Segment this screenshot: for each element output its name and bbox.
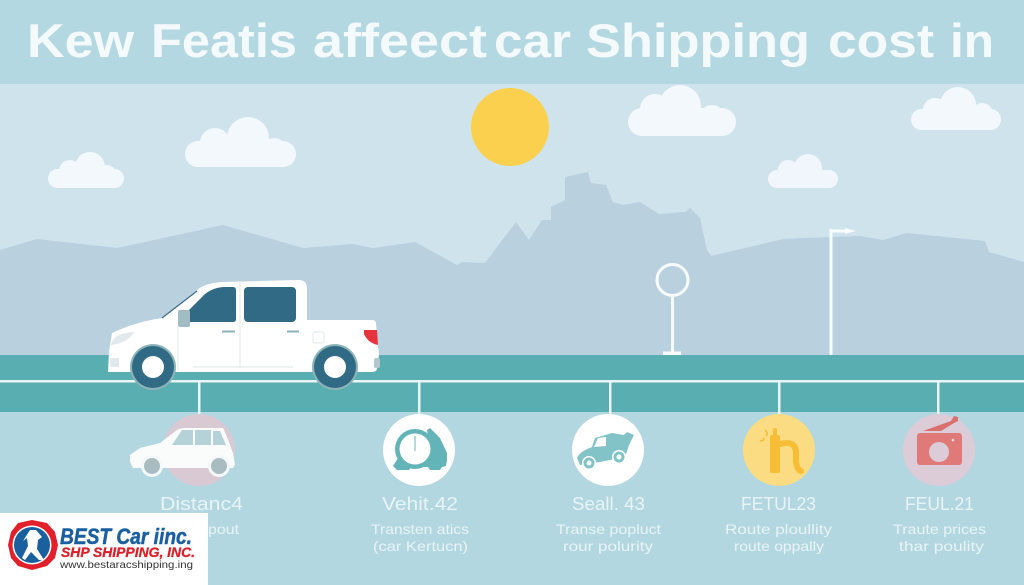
title: affeect xyxy=(313,14,487,67)
label: seasonality: Seall. 43 xyxy=(572,494,645,514)
description: fuel prices xyxy=(893,521,986,554)
title: car xyxy=(494,14,571,67)
description: fuel: route oppally xyxy=(734,538,824,554)
description: vehicle xyxy=(371,521,469,554)
cloud 5 xyxy=(911,87,1001,130)
door handles xyxy=(222,330,299,332)
label: vehicle: Vehit.42 xyxy=(382,494,458,514)
pickup truck xyxy=(108,280,380,390)
title: Kew xyxy=(27,14,134,67)
sky background xyxy=(0,84,1024,359)
description: vehicle: Transten atics xyxy=(371,521,469,537)
factor 1: distance xyxy=(130,414,243,537)
icon: gauge xyxy=(383,414,455,486)
ring road sign xyxy=(657,264,688,354)
sun xyxy=(471,88,549,166)
truck body xyxy=(108,280,379,372)
tailgate mark xyxy=(313,332,324,343)
description: fuel prices: thar poulity xyxy=(899,538,984,554)
bumper xyxy=(374,358,380,368)
cloud 1 xyxy=(48,152,124,188)
title band xyxy=(0,0,1024,84)
description: fuel: Route ploullity xyxy=(725,521,832,537)
title: in xyxy=(950,14,994,67)
label: fuel: FETUL23 xyxy=(741,494,816,514)
cloud 3 xyxy=(628,85,736,136)
cloud 2 xyxy=(185,117,296,167)
factor 4: fuel xyxy=(725,414,832,554)
cloud 4 xyxy=(768,154,838,188)
logo url: www.bestaracshipping.ing xyxy=(59,559,193,571)
fog lamp xyxy=(110,358,119,367)
description: seasonality: rour polurity xyxy=(563,538,653,554)
rear wheel xyxy=(312,344,358,390)
title: cost xyxy=(828,14,934,67)
windshield edge xyxy=(162,291,197,318)
icon: red camera xyxy=(903,414,975,486)
factor 5: fuel prices xyxy=(893,414,986,554)
description: seasonality: Transe popluct xyxy=(556,521,661,537)
title: Featis xyxy=(151,14,297,67)
mountains xyxy=(0,172,1024,360)
mirror xyxy=(178,310,190,327)
description: vehicle: (car Kertucn) xyxy=(373,538,468,554)
logo panel xyxy=(0,513,208,585)
factor 2: vehicle xyxy=(371,414,469,554)
front window xyxy=(185,287,236,322)
label: distance: Distanc4 xyxy=(160,494,243,514)
logo emblem xyxy=(8,520,58,570)
road xyxy=(0,355,1024,412)
icon: off-road car xyxy=(572,414,644,486)
door seams xyxy=(178,281,293,370)
description: fuel prices: Traute prices xyxy=(893,521,986,537)
rear window xyxy=(244,287,296,322)
description: seasonality xyxy=(556,521,661,554)
flag pole xyxy=(830,228,856,356)
timeline xyxy=(0,380,1024,414)
lower background xyxy=(0,412,1024,585)
tail lamp xyxy=(364,330,378,345)
logo name: BEST Car iinc. xyxy=(60,524,192,549)
description: distance: pout xyxy=(208,521,239,537)
description: fuel xyxy=(725,521,832,554)
icon: small car xyxy=(130,414,235,486)
factor 3: seasonality xyxy=(556,414,661,554)
headlight xyxy=(111,332,134,345)
title xyxy=(27,14,994,67)
label: fuel prices: FEUL.21 xyxy=(905,494,974,514)
logo subtitle: SHP SHIPPING, INC. xyxy=(61,544,195,560)
front wheel xyxy=(130,344,176,390)
icon: fuel pump xyxy=(743,414,815,486)
title: Shipping xyxy=(586,14,810,67)
